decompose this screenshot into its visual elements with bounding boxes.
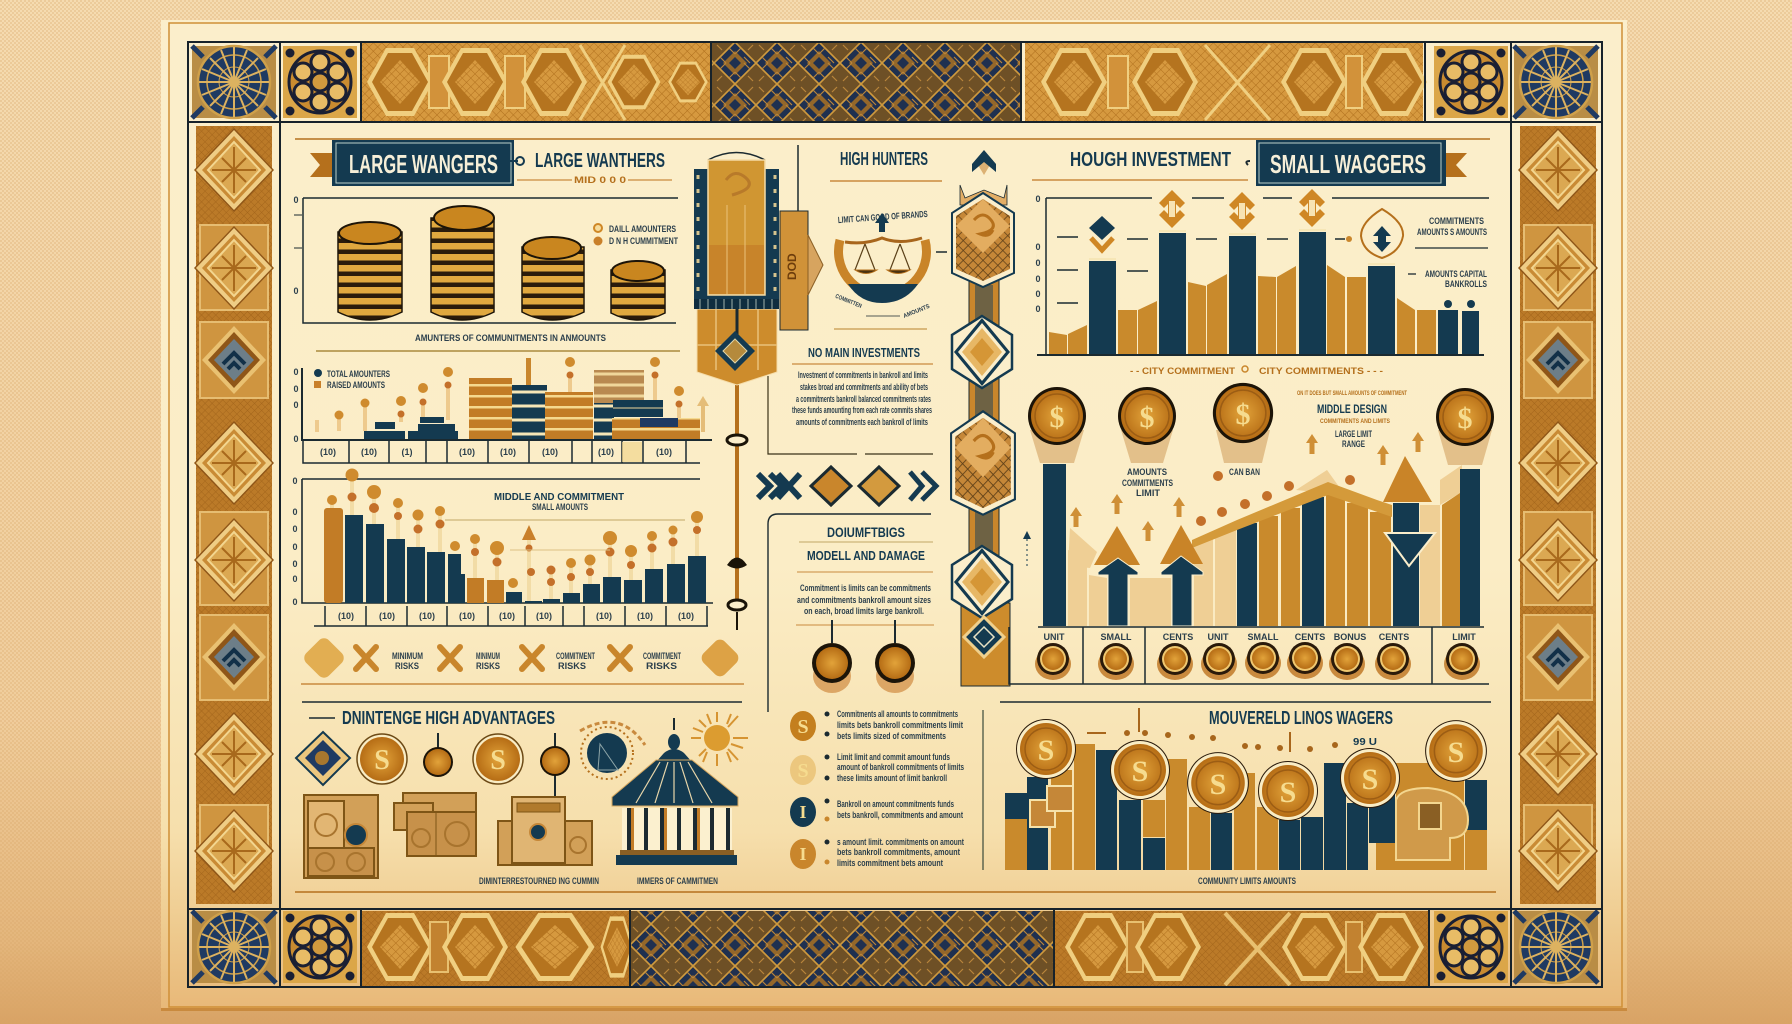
chart: declining bars [292, 468, 713, 626]
panel: documents [768, 514, 934, 712]
base [961, 603, 1010, 686]
heading: large wanthers: LARGE WANTHERS [535, 150, 665, 172]
panel: documents: Commitment is limits can be commitments [800, 583, 931, 593]
icon row with crosses: MINIMUM [476, 651, 500, 661]
legend: TOTAL AMOUNTERS [327, 369, 390, 379]
panel: documents: on each, broad limits large bankroll. [804, 606, 924, 616]
markers [1089, 189, 1475, 308]
ornamental border [188, 42, 1602, 987]
chart: declining bars: 0 [292, 524, 298, 534]
stem with knots [727, 385, 747, 630]
chart title: MIDDLE AND COMMITMENT [494, 492, 624, 503]
badge row 1: limits bets bankroll commitments limit [837, 720, 963, 730]
table row: (10) [596, 611, 612, 621]
coins: $ [1050, 401, 1064, 434]
table row: (10) [499, 611, 515, 621]
chart: investment bars: AMOUNTS CAPITAL [1425, 269, 1487, 279]
corner medallions [192, 45, 1598, 984]
table row: (10) [500, 447, 516, 457]
chart: investment bars: 0 [1035, 274, 1041, 284]
notes: CAN BAN [1229, 467, 1260, 477]
tan bars [1068, 465, 1462, 626]
top gold band right [1025, 43, 1427, 121]
panel: documents: MODELL AND DAMAGE [807, 548, 925, 563]
ornamental totem [951, 150, 1015, 686]
diamond 4 [952, 546, 1012, 618]
banner: large wagers: LARGE WANGERS [349, 149, 498, 179]
large coins: S [1210, 768, 1226, 801]
dashes [1057, 237, 1345, 303]
notes [1122, 467, 1260, 498]
middle text: COMMITMENTS AND LIMITS [1320, 419, 1390, 425]
middle text: ON IT DOES BUT SMALL AMOUNTS OF COMMITMENT [1297, 391, 1407, 397]
pennant [697, 309, 777, 385]
navy panel [694, 169, 779, 309]
navy coin piles [364, 417, 458, 439]
chart title [445, 492, 685, 550]
icon row with crosses: MINIMUM [392, 651, 423, 661]
bank notes [304, 793, 592, 878]
gold bars [1259, 493, 1460, 626]
stack 4 [611, 261, 665, 320]
caption: AMUNTERS OF COMMUNITMENTS IN ANMOUNTS [415, 333, 606, 343]
icon row with crosses: RISKS [558, 661, 586, 671]
badge row 4: limits commitment bets amount [837, 858, 943, 868]
scale emblem: AMOUNTS [903, 304, 931, 320]
coin cups [1030, 430, 1492, 465]
badge row 2: amount of bankroll commitments of limits [837, 762, 964, 772]
table row: (10) [459, 447, 475, 457]
temple [612, 718, 738, 865]
large coins: S [1038, 734, 1054, 767]
baseline table [1009, 627, 1489, 684]
baseline table: CENTS [1163, 632, 1193, 642]
large coins [1016, 719, 1487, 821]
table row: (10) [598, 447, 614, 457]
navy globe [580, 722, 645, 779]
chart: declining bars: 0 [292, 597, 298, 607]
banner: large wagers [310, 140, 514, 186]
chart: mixed stacks: 0 [293, 367, 299, 377]
legend: DAILL AMOUNTERS [609, 224, 676, 234]
middle text: LARGE LIMIT [1335, 429, 1372, 439]
chart: investment bars: 0 [1035, 194, 1041, 204]
table row: (10) [379, 611, 395, 621]
side tab [780, 211, 823, 330]
caption: CITY COMMITMENTS - - - [1259, 366, 1383, 376]
navy bars [1089, 232, 1479, 355]
scale emblem: COMMITTEN [834, 294, 862, 310]
hexagon 3 [951, 411, 1015, 515]
coins: $ [1458, 402, 1472, 435]
badge row 3 [790, 797, 963, 827]
top lattice band [712, 43, 1020, 121]
heading: high hunters: HIGH HUNTERS [840, 149, 928, 169]
notes: LIMIT [1136, 488, 1161, 498]
baseline table: BONUS [1334, 632, 1366, 642]
badge row 1 [790, 709, 963, 741]
chart: mixed stacks [293, 357, 712, 463]
panel: moderate wagers chart: 99 U [1353, 737, 1377, 748]
table row [314, 606, 708, 626]
heading: DNINTENGE HIGH ADVANTAGES [342, 708, 555, 728]
baseline table: SMALL [1248, 632, 1279, 642]
chart: investment bars: BANKROLLS [1445, 279, 1487, 289]
coins: $ [1140, 401, 1154, 434]
heading: hough investment: HOUGH INVESTMENT [1070, 149, 1231, 171]
text block: main investments: these funds amounting from each rate commits shares [792, 405, 932, 415]
scale emblem: LIMIT CAN GOOD OF BRANDS [838, 209, 928, 225]
emblem [1396, 788, 1468, 860]
badge row 3: bets bankroll, commitments and amount [837, 810, 963, 820]
text block: main investments: stakes broad and commitments and ability of bets [800, 382, 928, 392]
stack 3 [522, 237, 584, 320]
sun [691, 712, 748, 766]
text block: main investments: a commitments bankroll balanced commitments rates [796, 394, 931, 404]
panel: documents: DOIUMFTBIGS [827, 524, 905, 540]
table row: (10) [542, 447, 558, 457]
heading: large wanthers [506, 150, 672, 185]
legend: RAISED AMOUNTS [327, 380, 385, 390]
table row: (10) [678, 611, 694, 621]
diamond 2 [952, 316, 1012, 388]
dots [327, 468, 703, 588]
badge row 3: I [799, 802, 807, 822]
gold panel [708, 152, 765, 295]
panel: documents: and commitments bankroll amount sizes [797, 595, 931, 605]
chart: declining bars: 0 [292, 507, 298, 517]
side notes: COMMITMENTS [1429, 216, 1484, 226]
icon row with crosses: RISKS [476, 661, 500, 671]
icon row with crosses: RISKS [646, 661, 677, 671]
paper sheet [161, 20, 1627, 1011]
text block: main investments: NO MAIN INVESTMENTS [808, 345, 920, 360]
chart: declining bars: 0 [292, 542, 298, 552]
coins: S [374, 745, 390, 776]
coins: S [490, 745, 506, 776]
notes: AMOUNTS [1127, 467, 1167, 477]
icon row with crosses: COMMITMENT [556, 651, 595, 661]
large coins: S [1132, 755, 1148, 788]
diamond seal [715, 309, 755, 371]
chart: coin stacks: 0 [293, 286, 299, 296]
banner: small wagers: SMALL WAGGERS [1270, 149, 1426, 179]
strip [969, 280, 999, 610]
large coins: S [1448, 736, 1464, 769]
large coins: S [1280, 776, 1296, 809]
large coins: S [1362, 763, 1378, 796]
icon row with crosses: RISKS [395, 661, 419, 671]
chart: investment bars: 0 [1035, 242, 1041, 252]
knot tiles [283, 46, 1508, 983]
legend [314, 369, 390, 390]
bottom gold band right [1055, 911, 1429, 986]
text block: main investments: Investment of commitments in bankroll and limits [798, 370, 928, 380]
base seal [964, 617, 1004, 657]
baseline table: UNIT [1044, 632, 1065, 642]
middle text: RANGE [1342, 439, 1365, 449]
up arrows [1094, 525, 1203, 626]
coins: $ [1236, 398, 1250, 431]
baseline table: LIMIT [1452, 632, 1476, 642]
heading: hough investment [1032, 149, 1250, 180]
baseline table: CENTS [1295, 632, 1325, 642]
table row: (1) [402, 447, 413, 457]
hanging coins [812, 620, 915, 693]
badge row 4: s amount limit. commitments on amount [837, 837, 964, 847]
badge row 2: Limit limit and commit amount funds [837, 752, 950, 762]
chart: coin stacks [293, 195, 678, 343]
scroll emblem [694, 145, 823, 385]
table row: (10) [361, 447, 377, 457]
bars [1005, 744, 1487, 870]
badge row 4: I [799, 844, 807, 864]
bottom lattice band [630, 911, 1053, 986]
text block: main investments [768, 345, 933, 454]
table row: (10) [536, 611, 552, 621]
badge row 3: Bankroll on amount commitments funds [837, 799, 954, 809]
coins [1028, 383, 1494, 446]
table row: (10) [338, 611, 354, 621]
info rows with badges [790, 709, 983, 870]
chart title: SMALL AMOUNTS [532, 502, 588, 512]
stack 1 [338, 222, 402, 320]
legend [594, 224, 678, 246]
badge row 1: Commitments all amounts to commitments [837, 709, 958, 719]
heading: MOUVERELD LINOS WAGERS [1209, 708, 1393, 728]
baseline table: SMALL [1100, 632, 1132, 642]
bottom gold band left [361, 911, 634, 986]
top arrow [960, 150, 1007, 205]
badge row 2: these limits amount of limit bankroll [837, 773, 947, 783]
chart: mixed stacks: 0 [293, 400, 299, 410]
chart: investment bars: 0 [1035, 304, 1041, 314]
chart: declining bars: 0 [292, 476, 298, 486]
heading: high hunters [830, 149, 942, 181]
table row [303, 441, 700, 463]
heading: large wanthers: MID 0 0 0 [574, 175, 626, 185]
down arrow [1383, 456, 1435, 626]
chevron row [758, 467, 936, 505]
baseline table: CENTS [1379, 632, 1409, 642]
chart: growth area [1009, 383, 1494, 684]
large piles [469, 378, 512, 439]
chart: mixed stacks: 0 [293, 434, 299, 444]
chart: declining bars: 0 [292, 574, 298, 584]
left column [194, 126, 274, 904]
hexagon 1 [952, 193, 1014, 287]
sticks and dots [317, 375, 679, 432]
right column [1518, 126, 1598, 904]
band [1192, 482, 1392, 548]
text block: main investments: amounts of commitments each bankroll of limits [796, 417, 928, 427]
panel: advantages: IMMERS OF CAMMITMEN [637, 876, 718, 886]
coins [357, 733, 570, 796]
badge row 1: S [797, 716, 809, 738]
table row: (10) [459, 611, 475, 621]
icon row with crosses [301, 635, 741, 681]
table row: (10) [320, 447, 336, 457]
chart: declining bars: 0 [292, 559, 298, 569]
chart: investment bars: 0 [1035, 289, 1041, 299]
middle text [1297, 391, 1407, 449]
stack 2 [431, 206, 494, 320]
chart: investment bars: AMOUNTS S AMOUNTS [1417, 227, 1487, 237]
legend: D N H CUMMITMENT [609, 236, 678, 246]
caption: - - CITY COMMITMENT [1130, 366, 1236, 376]
badge row 4 [790, 837, 964, 869]
panel: moderate wagers chart [1005, 708, 1487, 886]
badge row 4: bets bankroll commitments, amount [837, 847, 960, 857]
table row: (10) [637, 611, 653, 621]
side tab: DOD [785, 253, 799, 280]
chart: coin stacks: 0 [293, 195, 299, 205]
badge row 2: S [797, 760, 809, 782]
caption: COMMUNITY LIMITS AMOUNTS [1198, 876, 1296, 886]
icon row with crosses: COMMITMENT [643, 651, 681, 661]
captions: DIMINTERRESTOURNED ING CUMMIN [479, 876, 599, 886]
dotted trend [1124, 730, 1338, 752]
bars [345, 515, 706, 603]
scale emblem [834, 209, 947, 329]
dots and small arrows [1196, 471, 1355, 526]
middle text: MIDDLE DESIGN [1317, 402, 1387, 416]
tiles [1030, 786, 1073, 827]
chart: investment bars [1035, 189, 1489, 376]
badge row 2 [790, 752, 964, 785]
chart: investment bars: 0 [1035, 258, 1041, 268]
gold area bars [1049, 265, 1436, 355]
baseline table: UNIT [1208, 632, 1229, 642]
navy diamond icon [296, 732, 350, 785]
navy bars [1043, 464, 1480, 626]
table row: (10) [419, 611, 435, 621]
chart: mixed stacks: 0 [293, 384, 299, 394]
table row: (10) [656, 447, 672, 457]
caption [1130, 366, 1383, 376]
badge row 1: bets limits sized of commitments [837, 731, 946, 741]
panel: advantages [296, 708, 748, 886]
notes: COMMITMENTS [1122, 478, 1173, 488]
frame rules [295, 139, 1496, 892]
top gold band left [361, 43, 711, 121]
banner: small wagers [1256, 140, 1467, 186]
